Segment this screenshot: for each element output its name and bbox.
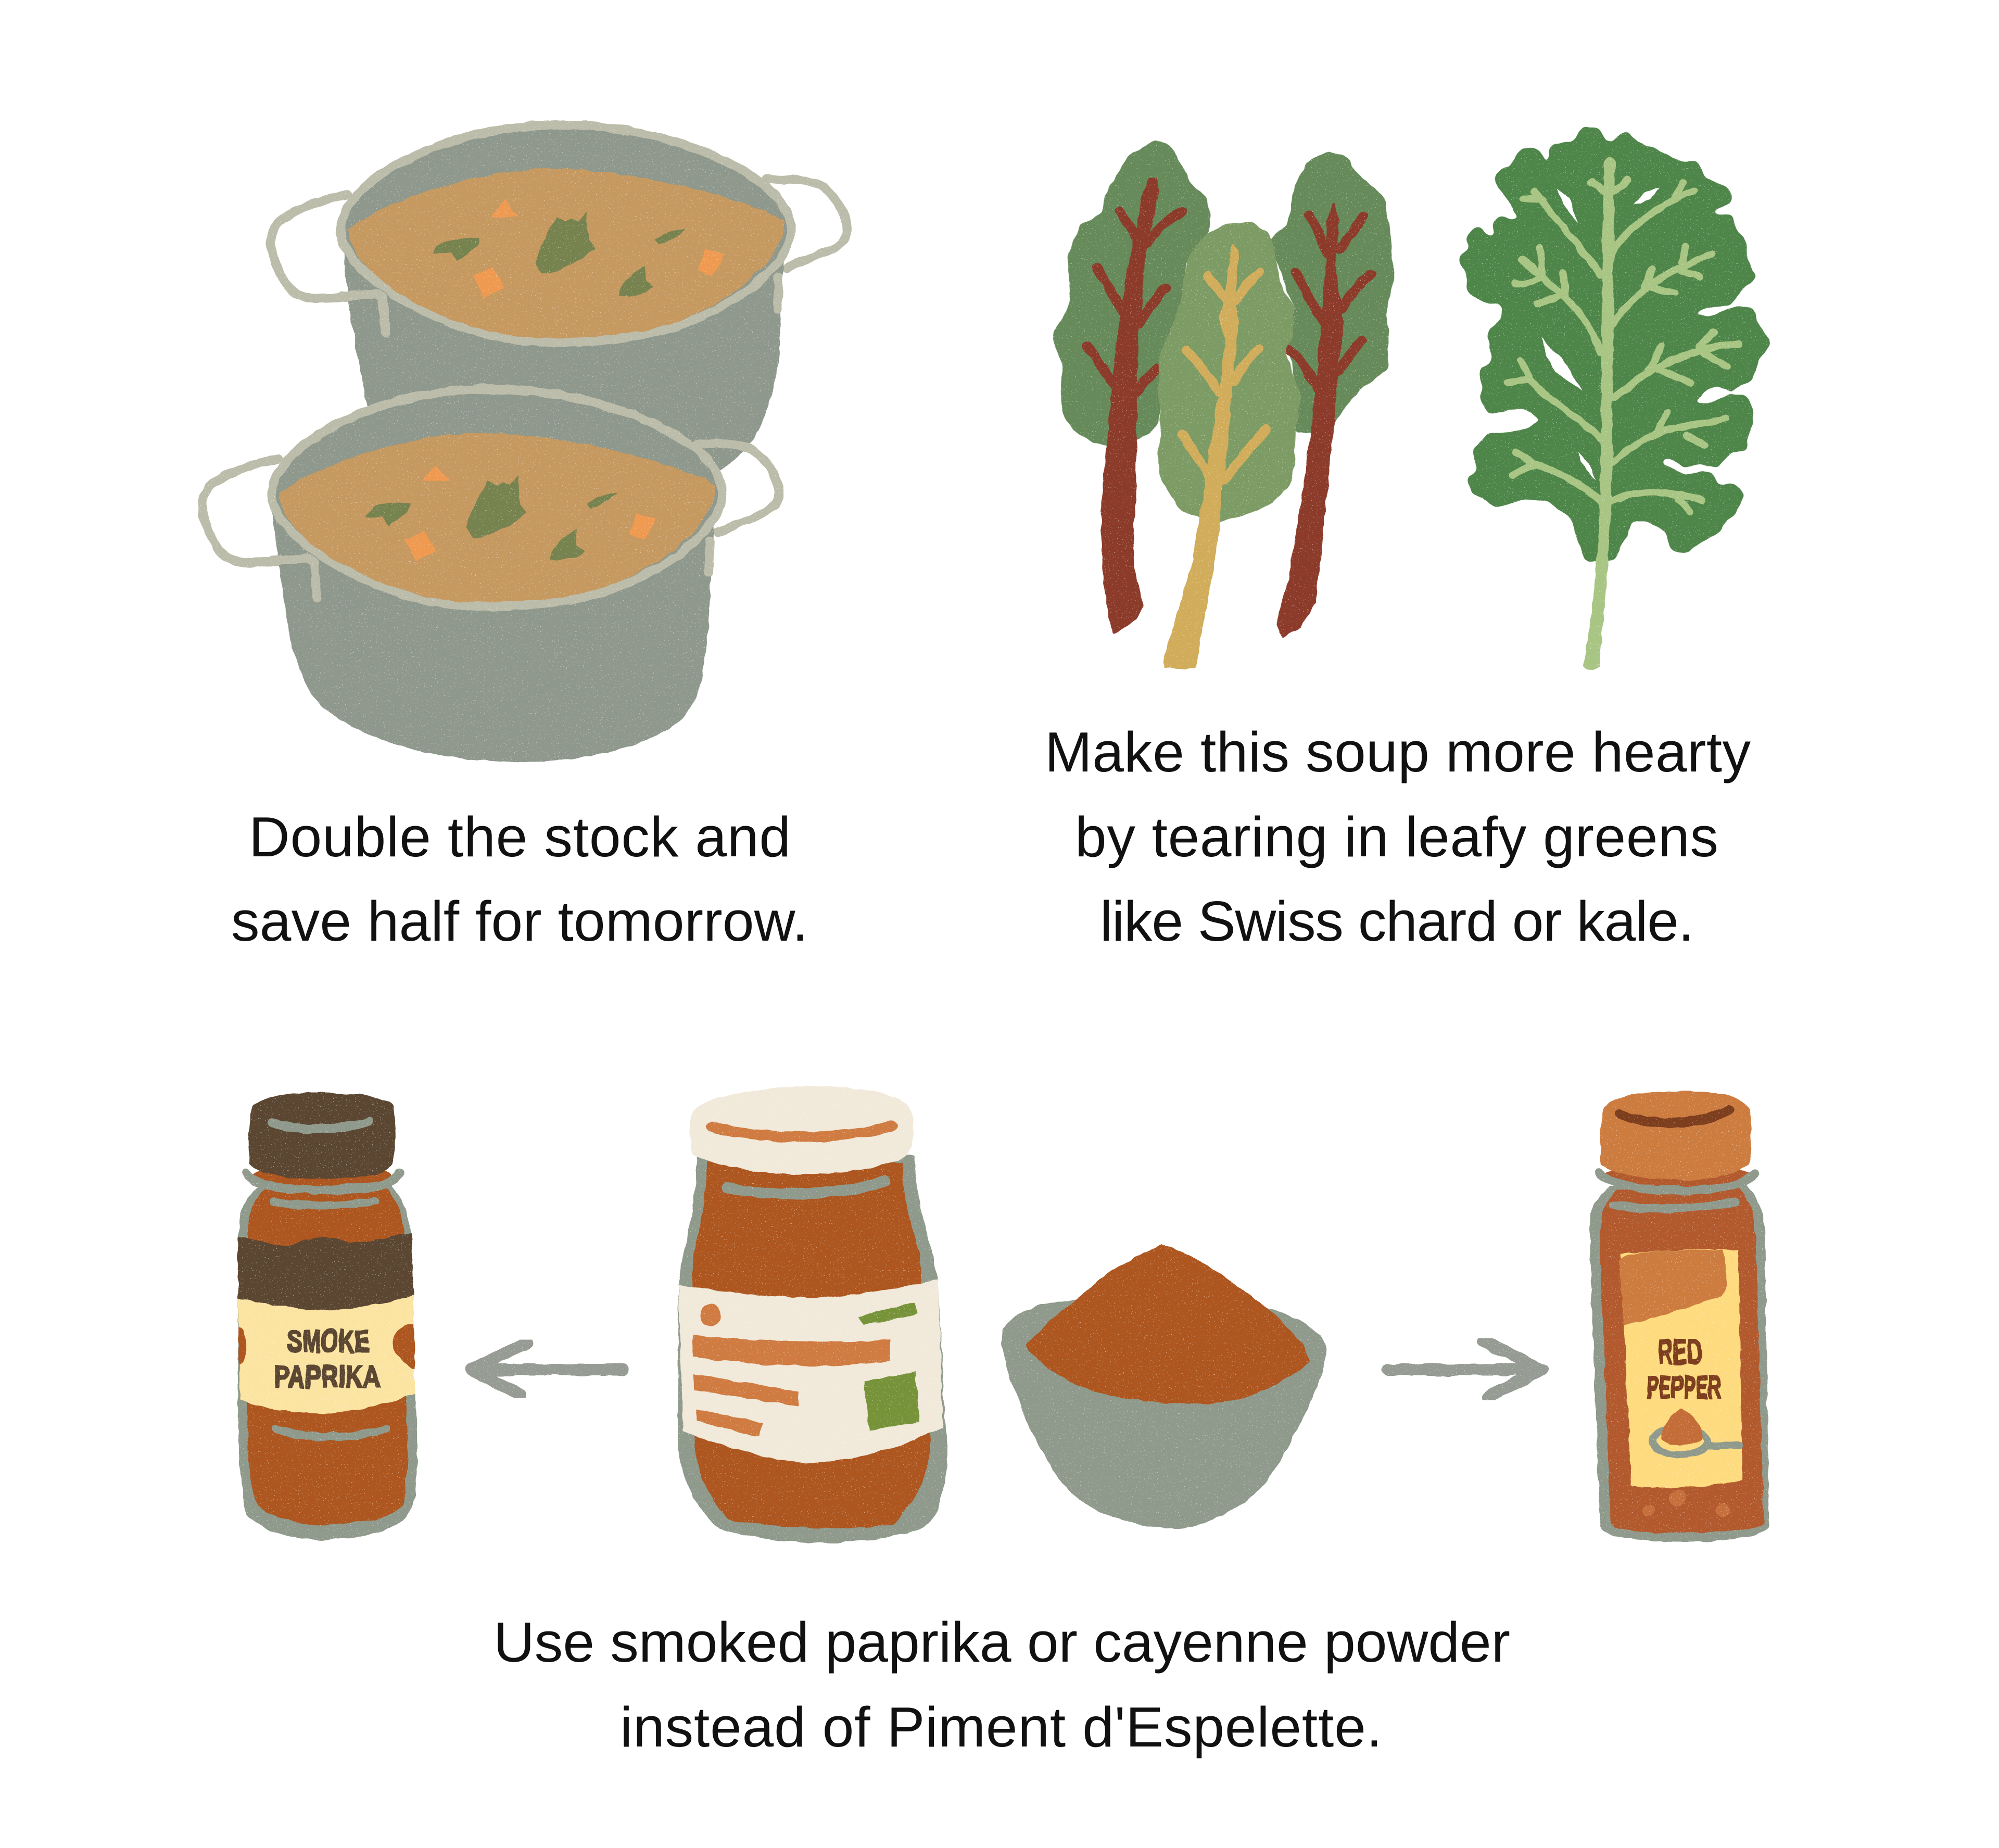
text: paprika substitution: [494, 1611, 1510, 1759]
arrow: left: [471, 1343, 623, 1395]
text: leafy greens: Make this soup more hearty: [1045, 720, 1751, 784]
text: paprika substitution: Use smoked paprika or cayenne powder: [494, 1611, 1510, 1674]
icon: smoked paprika jar: [238, 1093, 417, 1540]
text: double the stock: [231, 805, 808, 953]
jar label text: PAPRIKA: [274, 1359, 380, 1394]
icon: piment jar: [678, 1086, 947, 1543]
back pot: [271, 125, 847, 471]
text: double the stock: save half for tomorrow.: [231, 890, 808, 953]
icon: two soup pots: [203, 125, 847, 762]
text: leafy greens: by tearing in leafy greens: [1075, 805, 1718, 869]
text: paprika substitution: instead of Piment d'Espelette.: [620, 1695, 1382, 1759]
jar label text: PEPPER: [1647, 1370, 1721, 1406]
text: double the stock: Double the stock and: [249, 805, 791, 869]
kale leaf holes: [1541, 187, 1659, 479]
arrow: right: [1388, 1341, 1543, 1397]
jar label text: [1647, 1332, 1721, 1406]
right chard leaf: [1269, 150, 1394, 637]
front pot: [203, 389, 779, 762]
left chard leaf: [1052, 141, 1212, 632]
middle chard leaf: [1158, 222, 1300, 667]
jar label text: SMOKE: [287, 1324, 370, 1359]
kale blade: [1459, 127, 1770, 561]
icon: bowl of powder: [1002, 1245, 1326, 1529]
jar label text: RED: [1658, 1332, 1702, 1372]
icon: red pepper jar: [1589, 1091, 1769, 1542]
jar label text: [274, 1324, 380, 1394]
icon: Swiss chard: [1052, 141, 1394, 667]
icon: kale leaf: [1459, 127, 1770, 670]
text: leafy greens: [1045, 720, 1751, 953]
kale stem and veins: [1508, 163, 1739, 670]
text: leafy greens: like Swiss chard or kale.: [1100, 890, 1694, 953]
